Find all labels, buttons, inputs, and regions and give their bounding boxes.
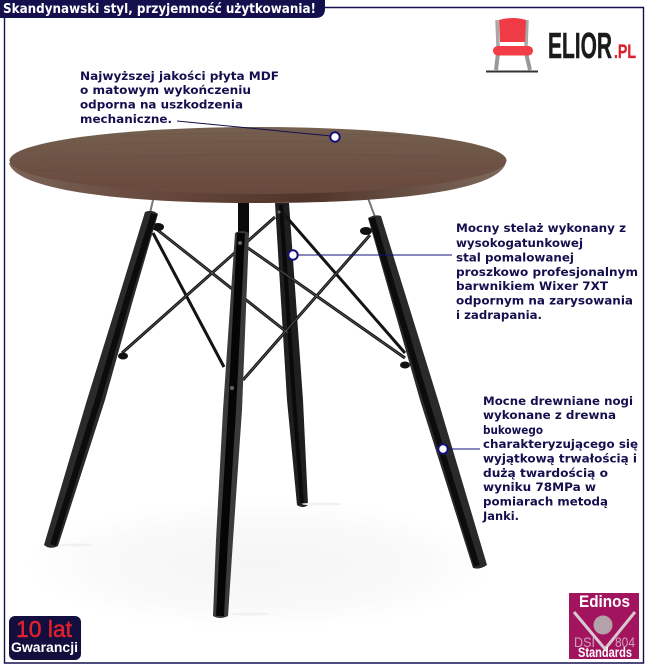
text block: wykonane z drewna: [483, 408, 616, 422]
brackets: [118, 223, 410, 368]
right leg: [368, 215, 487, 569]
badge: 10 lat gwarancji: [9, 616, 81, 660]
banner: Skandynawski styl, przyjemność użytkowania!: [3, 2, 316, 17]
badge: Edinos standards: DSI: [574, 634, 595, 650]
text block: charakteryzującego się: [483, 437, 638, 451]
text block: Mocne drewniane nogi: [483, 394, 633, 408]
text block: wyniku 78MPa w: [483, 480, 596, 494]
table illustration: [9, 127, 506, 618]
foot shadows: [58, 502, 342, 616]
logo: Elior.pl: [486, 18, 636, 72]
left leg: [44, 211, 158, 548]
text block: i zadrapania.: [456, 308, 542, 322]
centre stub leg: [238, 202, 249, 236]
wood grain: [30, 133, 490, 188]
text block: stal pomalowanej: [456, 250, 574, 264]
text block: pomiarach metodą: [483, 494, 608, 508]
callout: steel frame: [288, 221, 638, 322]
text block: o matowym wykończeniu: [80, 83, 251, 97]
text block: wysokogatunkowej: [456, 236, 583, 250]
leader line: [448, 448, 480, 450]
badge: Edinos standards: Standards: [578, 645, 632, 660]
text block: mechaniczne.: [80, 112, 172, 126]
text block: Mocny stelaż wykonany z: [456, 221, 626, 235]
table top surface: [10, 127, 506, 194]
text block: wyjątkową trwałością i: [483, 452, 637, 466]
badge: 10 lat gwarancji: 10 lat: [16, 616, 73, 642]
steel cross rods: [122, 213, 405, 380]
marker: [438, 444, 448, 454]
badge: Edinos standards: 804: [615, 634, 635, 650]
floor shadow: [25, 500, 495, 630]
logo: Elior.pl: .PL: [614, 42, 636, 63]
text block: Janki.: [482, 509, 519, 523]
text block: proszkowo profesjonalnym: [456, 265, 638, 279]
callout: wooden legs: [438, 394, 638, 523]
badge: Edinos standards: Edinos: [579, 592, 630, 611]
badge: Edinos standards: [569, 592, 639, 660]
leader line: [177, 121, 331, 136]
leader line: [298, 254, 452, 256]
screws: [230, 210, 281, 390]
text block: odporna na uszkodzenia: [80, 98, 243, 112]
text block: [456, 221, 638, 322]
marker: [330, 132, 340, 142]
text block: Najwyższej jakości płyta MDF: [80, 69, 279, 83]
marker: [288, 250, 298, 260]
text block: [80, 69, 279, 126]
callout: table top: [80, 69, 340, 142]
text block: barwnikiem Wixer 7XT: [456, 279, 608, 293]
badge: 10 lat gwarancji: Gwarancji: [11, 640, 78, 655]
text block: dużą twardością o: [483, 466, 608, 480]
back leg: [275, 203, 308, 507]
icon: red chair: [486, 18, 538, 72]
text block: [482, 394, 638, 523]
front leg: [213, 231, 249, 618]
table top edge: [9, 162, 506, 203]
text block: bukowego: [483, 423, 543, 437]
metal pins: [150, 198, 375, 217]
text block: odpornym na zarysowania: [456, 294, 633, 308]
